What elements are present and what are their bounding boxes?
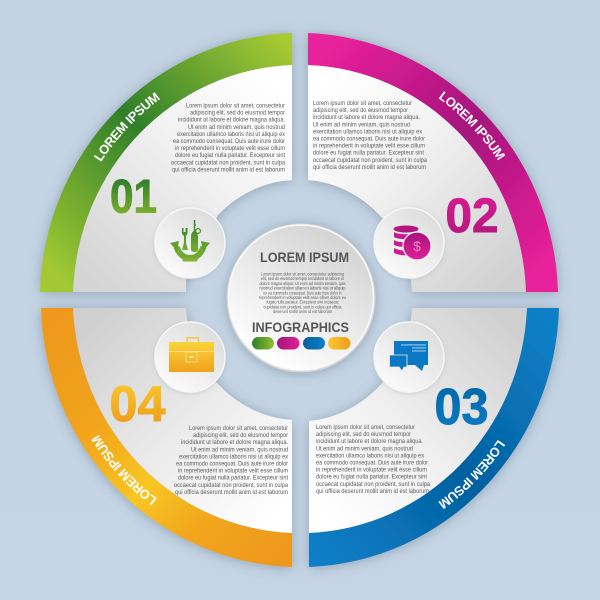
icon: speech bubbles <box>390 341 428 371</box>
quadrant 04 band label: LOREM IPSUM <box>92 435 157 506</box>
text block 04: adipiscing elit, sed do eiusmod tempor <box>193 432 289 439</box>
number 04: 04 <box>110 376 166 432</box>
centre text block: fugiat nulla pariatur. Excepteur sint occaecat <box>266 300 339 305</box>
text block 03: ea commodo consequat. Duis aute irure dolor <box>316 460 429 466</box>
text block 01: adipiscing elit, sed do eiusmod tempor <box>190 110 286 117</box>
centre text block: reprehenderit in voluptate velit esse cillum dolore eu <box>259 295 347 300</box>
text block 02: adipiscing elit, sed do eiusmod tempor <box>313 107 409 114</box>
text block 04: Lorem ipsum dolor sit amet, consectetur <box>189 425 289 432</box>
text block 04: exercitation ullamco laboris nisi ut aliquip ex <box>179 453 289 460</box>
panel: 02 pink quadrant <box>302 28 564 299</box>
centre heading: LOREM IPSUM <box>260 249 349 265</box>
text block 01 <box>171 102 286 173</box>
text block 01: occaecat cupidatat non proident, sunt in culpa <box>171 159 285 166</box>
icon: wrench, screwdriver and gear <box>170 220 210 262</box>
quadrant 03 band label: LOREM IPSUM <box>438 440 506 509</box>
text block 03: exercitation ullamco laboris nisi ut aliquip ex <box>316 452 425 459</box>
text block 01: Lorem ipsum dolor sit amet, consectetur <box>186 102 286 110</box>
quadrant 01 shape <box>40 33 292 292</box>
text block 04: Ut enim ad minim veniam, quis nostrud <box>191 446 288 453</box>
text block 02: incididunt ut labore et dolore magna aliqua. <box>313 114 420 121</box>
quadrant 01 band label: LOREM IPSUM <box>94 92 160 162</box>
text block 03: dolore eu fugiat nulla pariatur. Excepteur sint <box>316 474 427 481</box>
centre disc face <box>228 225 374 370</box>
text block 01: in reprehenderit in voluptate velit esse cillum <box>175 145 285 152</box>
icon: coin stack with dollar coin: $ <box>413 238 421 254</box>
text block 02: ea commodo consequat. Duis aute irure dolor <box>313 136 426 142</box>
text block 02 <box>313 100 427 171</box>
centre text block: elit, sed do eiusmod tempor incididunt ut labore et <box>261 276 345 281</box>
text block 02: Ut enim ad minim veniam, quis nostrud <box>313 121 410 128</box>
number 02: 02 <box>446 190 498 243</box>
text block 03: adipiscing elit, sed do eiusmod tempor <box>316 431 412 438</box>
icon badge: tools <box>155 208 225 278</box>
text block 03: qui officia deserunt mollit anim id est laborum <box>316 488 429 495</box>
centre text block: dolore magna aliqua. Ut enim ad minim veniam, quis <box>260 281 346 286</box>
text block 04: incididunt ut labore et dolore magna aliqua. <box>181 439 288 446</box>
quadrant 04 shape <box>41 308 292 567</box>
text block 01: qui officia deserunt mollit anim id est laborum <box>172 166 285 173</box>
infographics heading: INFOGRAPHICS <box>252 319 349 335</box>
text block 01: dolore eu fugiat nulla pariatur. Excepteur sint <box>175 152 285 159</box>
text block 01: exercitation ullamco laboris nisi ut aliquip ex <box>177 131 286 138</box>
text block 03: occaecat cupidatat non proident, sunt in culpa <box>316 481 430 488</box>
text block 04: in reprehenderit in voluptate velit esse cillum <box>178 468 288 475</box>
panel: 03 blue quadrant <box>303 303 564 574</box>
number 03: 03 <box>434 378 488 435</box>
text block 04: dolore eu fugiat nulla pariatur. Excepteur sint <box>178 475 288 482</box>
centre text block: cupidatat non proident, sunt in culpa qui officia <box>264 304 342 309</box>
text block 04 <box>174 425 289 496</box>
text block 04: ea commodo consequat. Duis aute irure dolor <box>176 460 289 468</box>
centre text block: nostrud exercitation ullamco laboris nisi ut aliquip <box>260 286 346 291</box>
panel: 04 orange quadrant <box>36 303 298 574</box>
text block 04: qui officia deserunt mollit anim id est laborum <box>175 489 288 496</box>
text block 02: qui officia deserunt mollit anim id est laborum <box>313 164 426 171</box>
text block 02: Lorem ipsum dolor sit amet, consectetur <box>313 100 413 107</box>
panel: 01 green quadrant <box>34 28 298 299</box>
text block 02: dolore eu fugiat nulla pariatur. Excepteur sint <box>313 150 424 157</box>
panel: centre circle <box>226 224 376 372</box>
text block 03: Lorem ipsum dolor sit amet, consectetur <box>316 424 416 431</box>
text block 04: occaecat cupidatat non proident, sunt in culpa <box>174 482 288 489</box>
icon badge: coins <box>374 208 444 278</box>
number 01: 01 <box>110 170 157 222</box>
text block 03: in reprehenderit in voluptate velit esse cillum <box>316 467 427 474</box>
centre text block: ex ea commodo consequat. Duis aute irure dolor in <box>264 290 342 295</box>
text block 01: incididunt ut labore et dolore magna aliqua. <box>178 117 285 124</box>
text block 02: in reprehenderit in voluptate velit esse cillum <box>313 143 425 150</box>
text block 01: Ut enim ad minim veniam, quis nostrud <box>188 124 285 131</box>
centre text block: deserunt mollit anim id est laborum <box>273 309 332 314</box>
centre text block: Lorem ipsum dolor sit amet, consectetur adipiscing <box>261 272 345 276</box>
text block 02: occaecat cupidatat non proident, sunt in culpa <box>313 157 427 164</box>
quadrant 02 band label: LOREM IPSUM <box>438 91 506 160</box>
icon: briefcase <box>169 338 214 372</box>
colour legend pills <box>252 337 350 350</box>
text block 01: ea commodo consequat. Duis aute irure dolor <box>173 138 286 145</box>
quadrant 03 shape <box>309 308 559 567</box>
centre text block <box>259 272 347 314</box>
text block 02: exercitation ullamco laboris nisi ut aliquip ex <box>313 128 423 135</box>
text block 03: Ut enim ad minim veniam, quis nostrud <box>316 445 413 452</box>
text block 03: incididunt ut labore et dolore magna aliqua. <box>316 438 423 445</box>
icon badge: speech bubbles <box>374 322 444 392</box>
text block 03 <box>316 424 430 495</box>
icon badge: briefcase <box>155 322 225 392</box>
quadrant 02 shape <box>308 33 558 292</box>
